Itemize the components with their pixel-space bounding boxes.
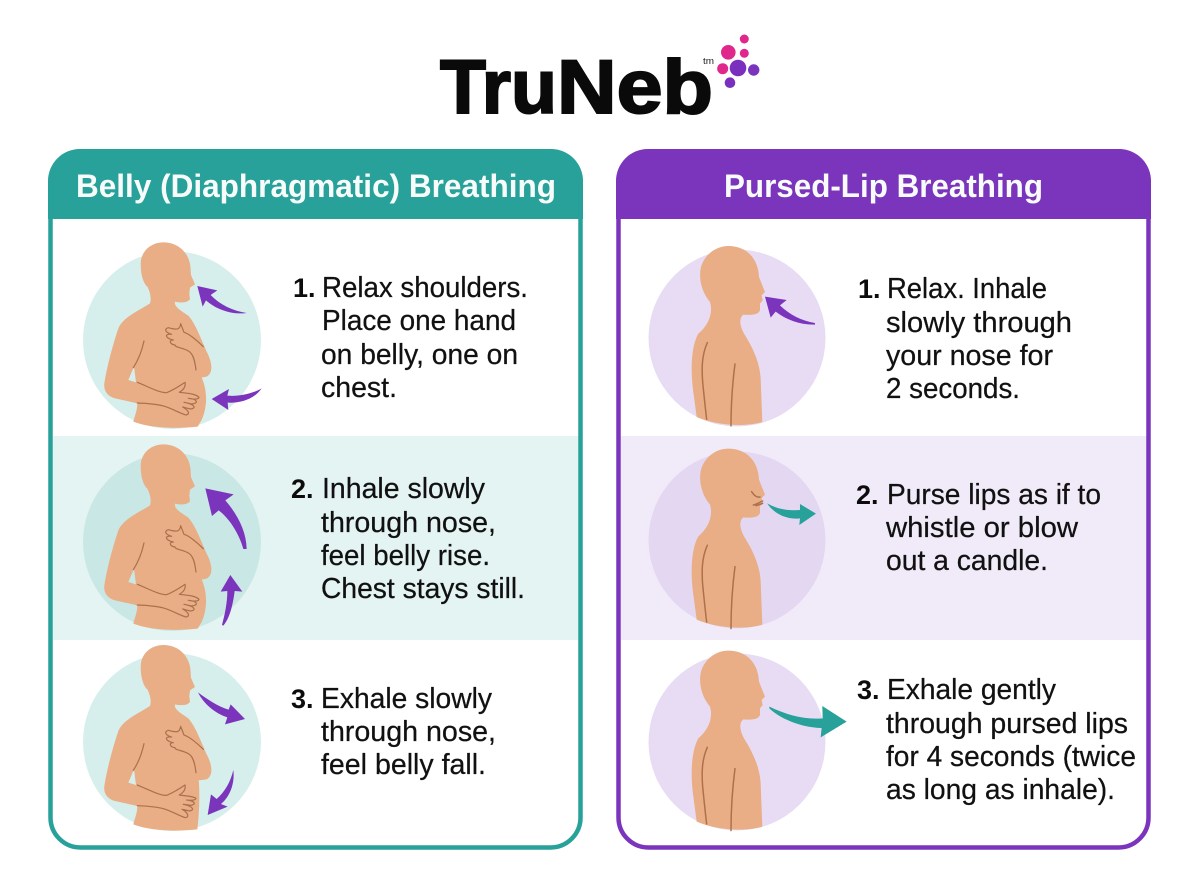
step 3 text: 3. <box>857 675 880 705</box>
step 3 illustration <box>648 651 847 831</box>
panel: belly breathing <box>48 149 583 848</box>
logo: TruNeb <box>440 34 759 130</box>
step 2 text: whistle or blow <box>885 512 1078 544</box>
step 1 text: on belly, one on <box>321 339 518 371</box>
step 2 text: Inhale slowly <box>322 473 486 505</box>
belly heading: Belly (Diaphragmatic) Breathing <box>76 168 556 204</box>
step 3 text: through nose, <box>321 716 496 748</box>
pursed-lip panel border <box>618 152 1148 848</box>
step 1 text: 2 seconds. <box>886 373 1020 405</box>
step 3 illustration <box>83 645 261 831</box>
step 2 band <box>53 436 579 640</box>
step 3 text: feel belly fall. <box>321 749 486 781</box>
pursed-lip heading: Pursed-Lip Breathing <box>724 168 1043 204</box>
step 3 text <box>291 683 496 781</box>
step 3 text: Exhale gently <box>887 674 1057 706</box>
step 2 text <box>291 473 525 605</box>
step 3 text <box>857 674 1136 806</box>
panel: pursed-lip breathing <box>616 149 1151 848</box>
step 1 text: your nose for <box>886 340 1054 372</box>
step 3 text: as long as inhale). <box>886 774 1115 806</box>
step 1 text <box>293 272 528 404</box>
step 1 text: slowly through <box>886 307 1072 339</box>
step 2 text <box>856 479 1101 577</box>
step 2 text: Purse lips as if to <box>887 479 1101 511</box>
step 1 text: 1. <box>858 274 881 304</box>
step 1 text: Relax. Inhale <box>887 273 1047 305</box>
step 2 text: through nose, <box>321 507 496 539</box>
step 1 illustration <box>648 246 826 426</box>
step 3 text: 3. <box>291 684 314 714</box>
logo dots <box>717 34 759 88</box>
step 2 illustration <box>648 449 826 629</box>
step 2 text: 2. <box>291 474 314 504</box>
step 1 text: Relax shoulders. <box>322 272 528 304</box>
step 3 text: through pursed lips <box>886 708 1128 740</box>
logo wordmark <box>440 45 713 130</box>
step 2 band <box>621 436 1147 640</box>
belly header bar <box>48 149 583 219</box>
logo wordmark: Tru <box>440 45 557 130</box>
belly panel border <box>50 152 580 848</box>
pursed-lip header bar <box>616 149 1151 219</box>
step 2 illustration <box>83 444 261 631</box>
step 1 text: Place one hand <box>322 305 516 337</box>
step 2 text: Chest stays still. <box>321 573 525 605</box>
step 2 text: feel belly rise. <box>321 540 490 572</box>
step 1 text: 1. <box>293 273 316 303</box>
step 1 illustration <box>83 242 262 429</box>
step 2 text: out a candle. <box>886 545 1048 577</box>
step 3 text: Exhale slowly <box>321 683 493 715</box>
step 1 text <box>858 273 1072 405</box>
trademark mark: tm <box>703 56 714 66</box>
step 3 text: for 4 seconds (twice <box>886 741 1136 773</box>
step 2 text: 2. <box>856 480 879 510</box>
step 1 text: chest. <box>321 372 397 404</box>
logo wordmark: Neb <box>557 45 713 130</box>
